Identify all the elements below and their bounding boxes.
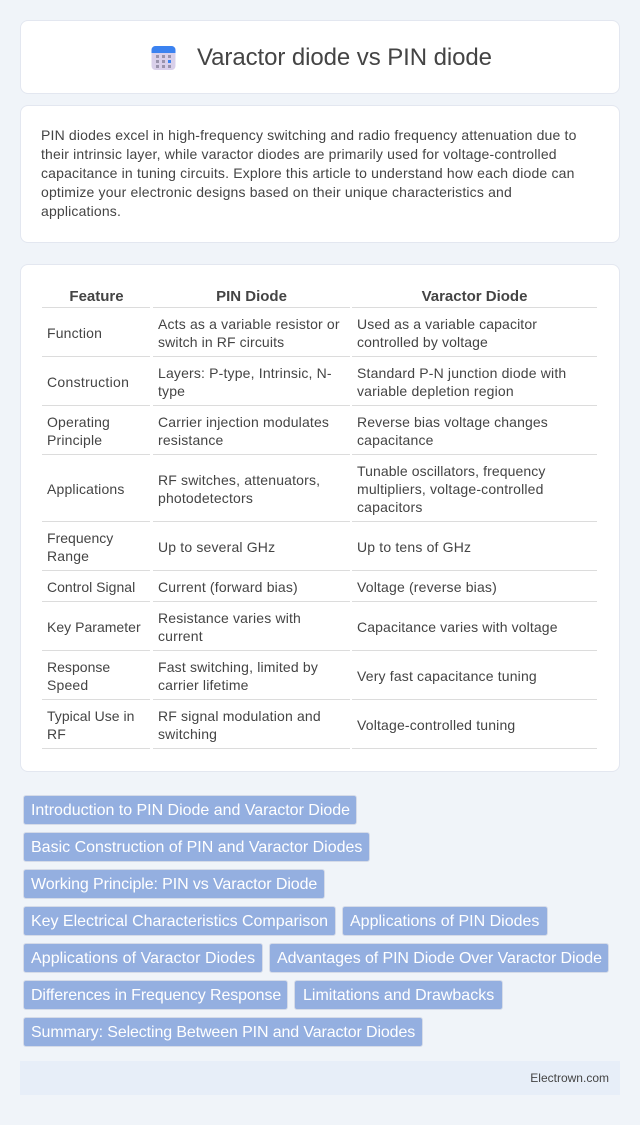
title: Varactor diode vs PIN diode [197,44,492,71]
tag [342,906,548,936]
row: Applications: Tunable oscillators, frequency [357,463,545,479]
row: Operating Principle: capacitance [357,432,434,448]
row: Operating Principle [42,414,597,455]
row: Operating Principle: Operating [47,414,110,430]
comparison table panel [20,264,620,772]
intro text panel [20,105,620,243]
row: Typical Use in RF: Voltage-controlled tuning [357,717,515,733]
tag: Applications of Varactor Diodes [31,950,255,967]
row: Response Speed: Speed [47,677,88,693]
row: Frequency Range: Up to several GHz [158,539,275,555]
tag [23,906,336,936]
row: Response Speed: Fast switching, limited by [158,659,318,675]
header panel [20,20,620,94]
icon: calendar [152,46,176,70]
intro paragraph: capacitance in tuning circuits. Explore this article to understand how each diode can [41,165,575,181]
intro paragraph: PIN diodes excel in high-frequency switching and radio frequency attenuation due to [41,127,577,143]
row: Construction: type [158,383,185,399]
table header row: Varactor Diode [422,288,527,305]
row: Applications: multipliers, voltage-controlled [357,481,544,497]
row: Typical Use in RF: RF [47,726,66,742]
tag: Working Principle: PIN vs Varactor Diode [31,876,317,893]
row: Response Speed: Very fast capacitance tuning [357,668,537,684]
row: Operating Principle: Principle [47,432,102,448]
row: Function: switch in RF circuits [158,334,284,350]
tag [23,943,263,973]
table header row: PIN Diode [216,288,287,305]
row: Control Signal: Control Signal [47,579,135,595]
row: Frequency Range [42,530,597,571]
tag: Limitations and Drawbacks [303,987,494,1004]
row: Operating Principle: Carrier injection modulates [158,414,329,430]
row: Frequency Range: Frequency [47,530,113,546]
row: Function: Acts as a variable resistor or [158,316,340,332]
row: Function: Used as a variable capacitor [357,316,537,332]
tag [23,795,357,825]
tag: Key Electrical Characteristics Comparison [31,913,328,930]
row: Typical Use in RF: RF signal modulation and [158,708,321,724]
row: Control Signal [42,579,597,602]
tag: Basic Construction of PIN and Varactor Diodes [31,839,362,856]
row: Construction [42,365,597,406]
tag [269,943,609,973]
tag [23,1017,423,1047]
comparison table [42,288,597,749]
tag: Advantages of PIN Diode Over Varactor Diode [277,950,602,967]
intro paragraph: optimize your electronic designs based on their unique characteristics and [41,184,512,200]
row: Operating Principle: Reverse bias voltage changes [357,414,548,430]
tag: Applications of PIN Diodes [350,913,539,930]
row: Function: Function [47,325,102,341]
row: Function: controlled by voltage [357,334,488,350]
row: Control Signal: Voltage (reverse bias) [357,579,497,595]
row: Key Parameter: Key Parameter [47,619,141,635]
row: Key Parameter: current [158,628,203,644]
row: Construction: variable depletion region [357,383,514,399]
row: Applications: capacitors [357,499,423,515]
tag [294,980,503,1010]
row: Key Parameter: Capacitance varies with voltage [357,619,558,635]
row: Response Speed: Response [47,659,110,675]
row: Construction: Layers: P-type, Intrinsic, N- [158,365,332,381]
intro paragraph: applications. [41,203,121,219]
intro paragraph: their intrinsic layer, while varactor diodes are primarily used for voltage-controlled [41,146,557,162]
tag: Differences in Frequency Response [31,987,281,1004]
row: Typical Use in RF: Typical Use in [47,708,134,724]
tag list [23,795,609,1047]
intro paragraph [41,127,577,219]
row: Operating Principle: resistance [158,432,224,448]
row: Construction: Construction [47,374,129,390]
tag [23,980,288,1010]
row: Key Parameter [42,610,597,651]
tag: Introduction to PIN Diode and Varactor Diode [31,802,350,819]
row: Key Parameter: Resistance varies with [158,610,301,626]
row: Construction: Standard P-N junction diode with [357,365,566,381]
table header row: Feature [69,288,124,305]
row: Response Speed: carrier lifetime [158,677,249,693]
row: Applications [42,463,597,522]
row: Frequency Range: Range [47,548,89,564]
row: Applications: RF switches, attenuators, [158,472,320,488]
footer [20,1061,620,1095]
tag: Summary: Selecting Between PIN and Varactor Diodes [31,1024,415,1041]
footer credit: Electrown.com [530,1071,609,1085]
row: Typical Use in RF [42,708,597,749]
row: Function [42,316,597,357]
row: Frequency Range: Up to tens of GHz [357,539,471,555]
tag [23,832,370,862]
row: Applications: Applications [47,481,125,497]
tag [23,869,325,899]
table header row [42,288,597,308]
row: Response Speed [42,659,597,700]
row: Typical Use in RF: switching [158,726,217,742]
row: Control Signal: Current (forward bias) [158,579,298,595]
row: Applications: photodetectors [158,490,253,506]
